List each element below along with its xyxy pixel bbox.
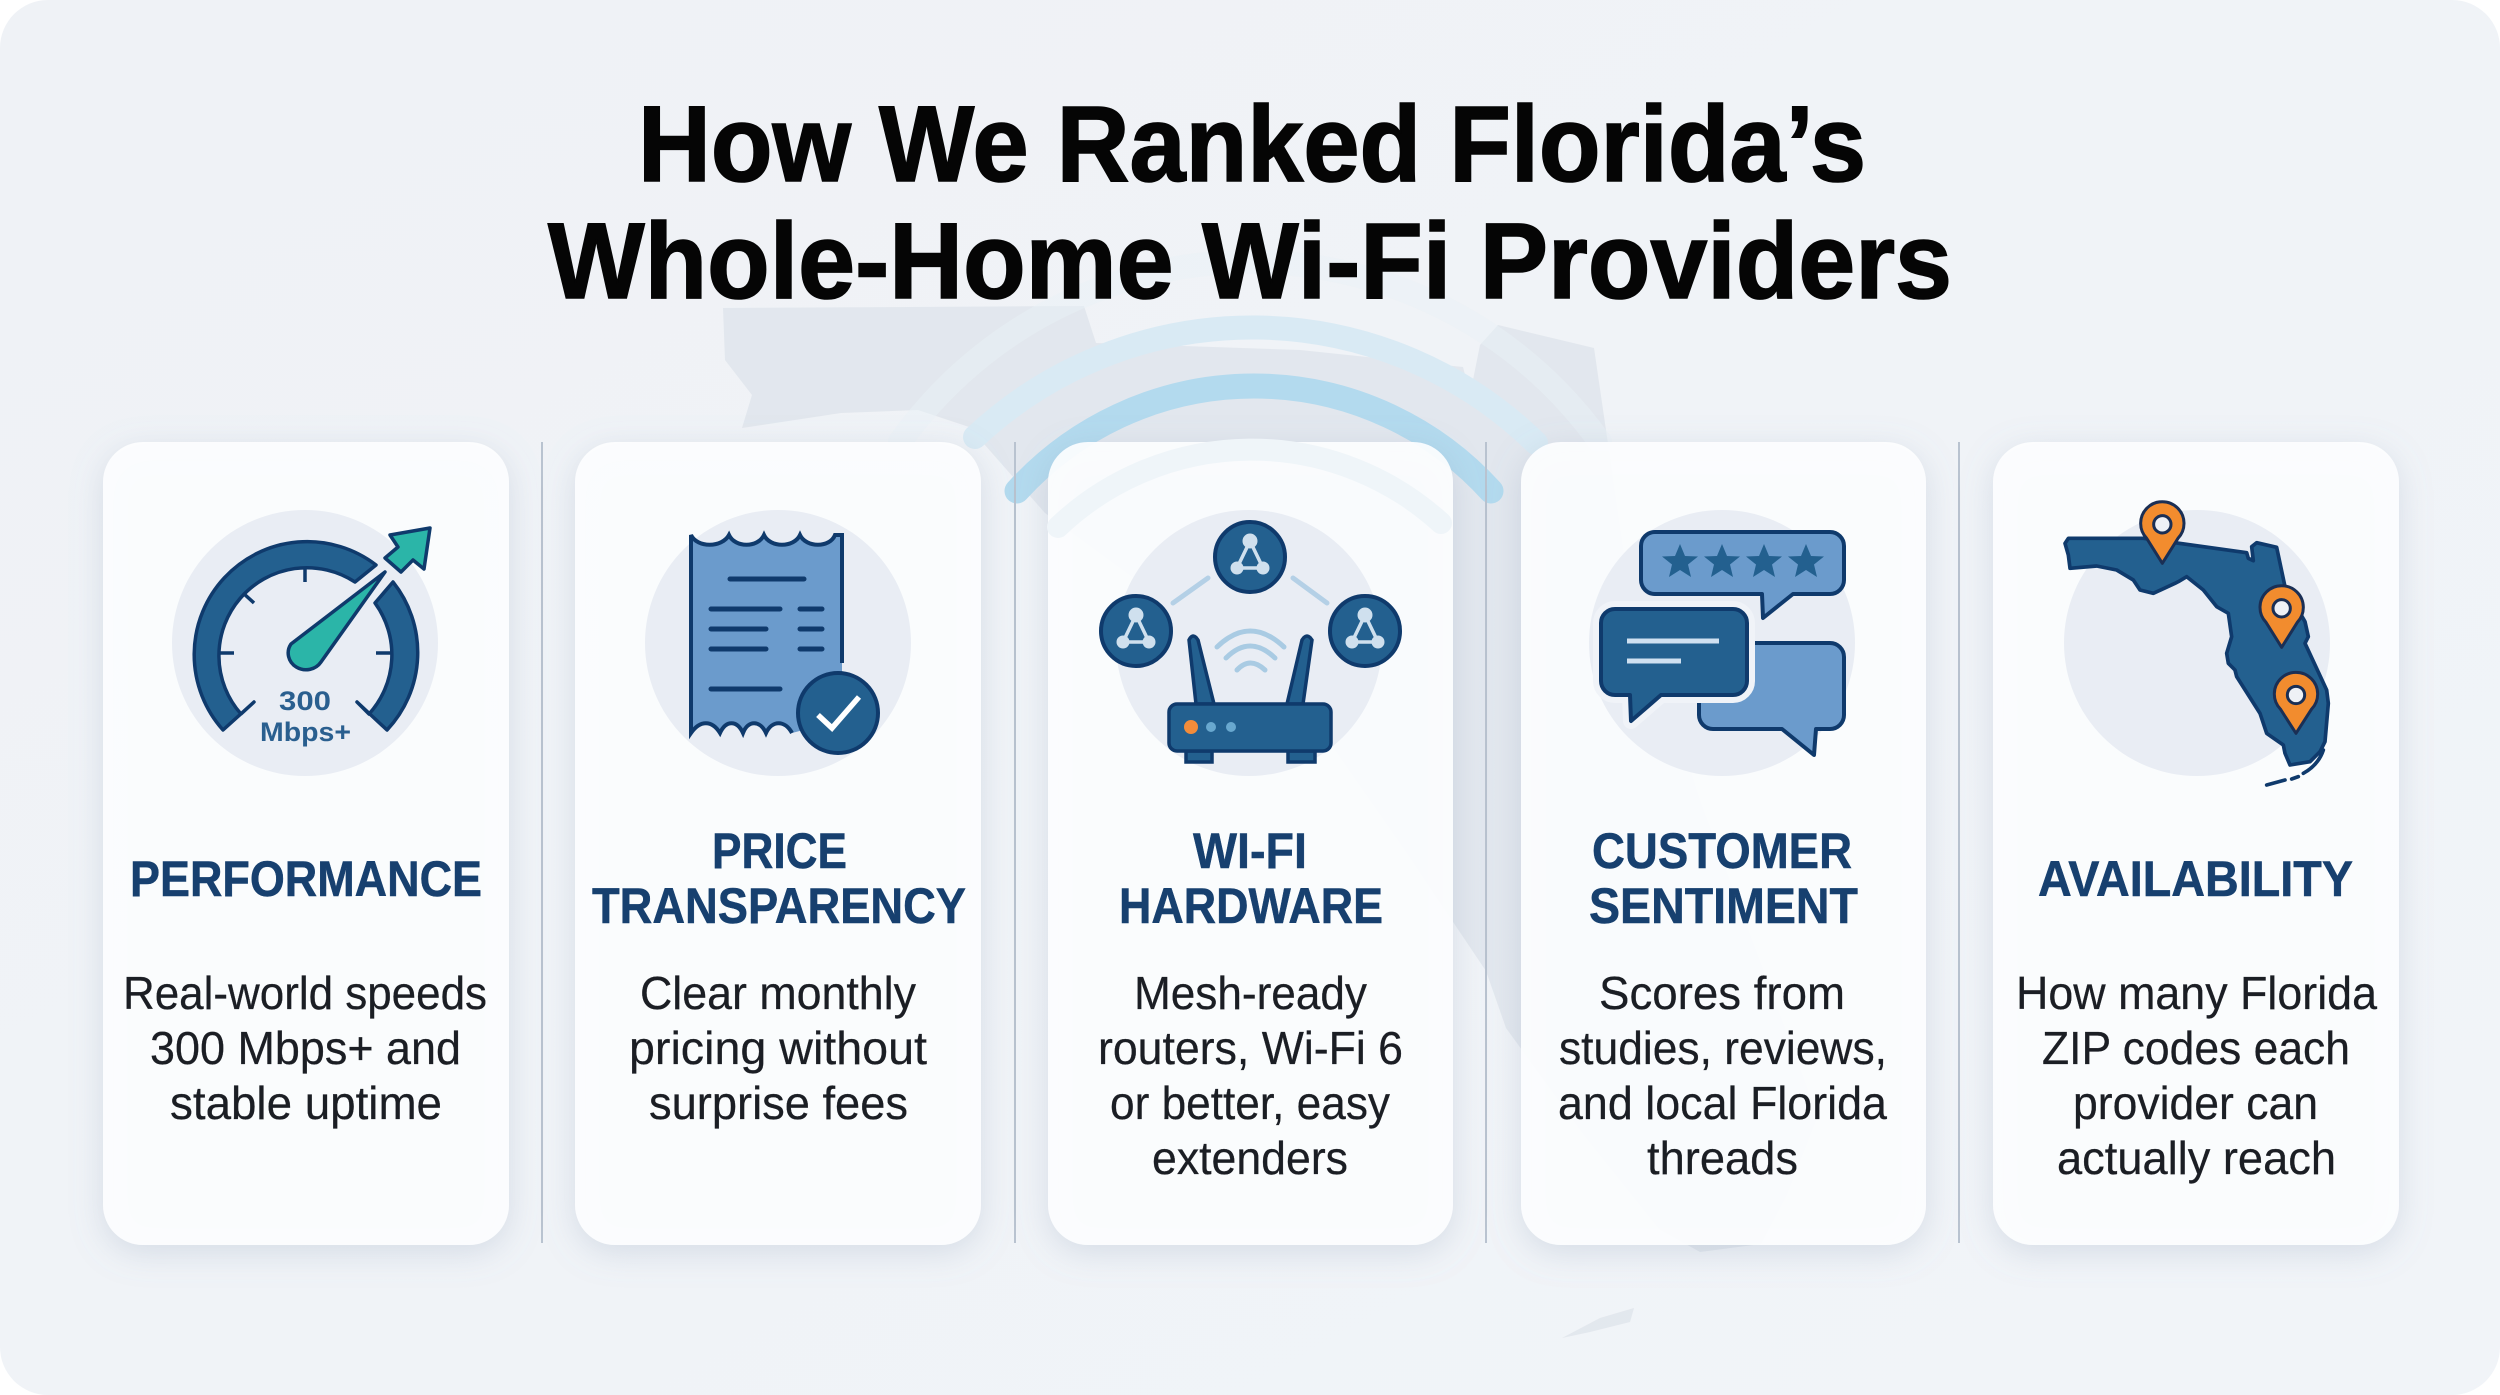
icon: speedometer (194, 528, 430, 730)
gauge label (260, 686, 351, 747)
description (123, 967, 487, 1129)
heading: AVAILABILITY (2038, 851, 2353, 907)
description: and local Florida (1558, 1077, 1887, 1129)
icon circle (2064, 510, 2330, 776)
icon: mesh router (1101, 522, 1400, 762)
description: How many Florida (2016, 967, 2377, 1019)
icon: receipt with check (691, 535, 878, 753)
description (1098, 967, 1403, 1184)
panel: wi-fi hardware (1048, 442, 1453, 1245)
description: threads (1647, 1132, 1798, 1184)
heading: PERFORMANCE (130, 851, 482, 907)
icon circle (645, 510, 911, 776)
gauge label: Mbps+ (260, 717, 351, 747)
heading: HARDWARE (1119, 878, 1383, 934)
panel: price transparency (575, 442, 981, 1245)
description: Scores from (1599, 967, 1845, 1019)
heading (592, 823, 966, 934)
gauge label: 300 (279, 686, 331, 716)
description: pricing without (629, 1022, 927, 1074)
description: ZIP codes each (2042, 1022, 2350, 1074)
icon circle (172, 510, 438, 776)
description: or better, easy (1110, 1077, 1390, 1129)
card background (575, 442, 981, 1245)
description: provider can (2073, 1077, 2318, 1129)
description: Real-world speeds (123, 967, 487, 1019)
description: Clear monthly (640, 967, 916, 1019)
description: studies, reviews, (1559, 1022, 1887, 1074)
icon circle (1116, 510, 1382, 776)
description: Mesh-ready (1134, 967, 1367, 1019)
description: extenders (1152, 1132, 1348, 1184)
watermark: Florida silhouette (723, 306, 1818, 1338)
heading (1589, 823, 1858, 934)
icon circle (1589, 510, 1855, 776)
description: routers, Wi-Fi 6 (1098, 1022, 1403, 1074)
heading: PRICE (712, 823, 847, 879)
panel: customer sentiment (1521, 442, 1926, 1245)
description (629, 967, 927, 1129)
dividers (542, 442, 1959, 1243)
description (1558, 967, 1887, 1184)
card background (1521, 442, 1926, 1245)
panel: availability (1993, 442, 2399, 1245)
icon: chat bubbles with stars (1601, 532, 1844, 755)
description (2016, 967, 2377, 1184)
card background (103, 442, 509, 1245)
inner wifi arc (1058, 450, 1441, 527)
title: How We Ranked Florida’s (638, 83, 1866, 204)
heading: WI-FI (1193, 823, 1307, 879)
icon: Florida map with pins (2065, 502, 2328, 785)
title (548, 83, 1952, 321)
description: 300 Mbps+ and (150, 1022, 461, 1074)
heading: SENTIMENT (1589, 878, 1858, 934)
description: actually reach (2057, 1132, 2336, 1184)
description: stable uptime (170, 1077, 442, 1129)
heading (1119, 823, 1383, 934)
panel: performance (103, 442, 509, 1245)
description: surprise fees (649, 1077, 908, 1129)
title: Whole-Home Wi-Fi Providers (548, 200, 1952, 321)
heading: CUSTOMER (1592, 823, 1852, 879)
wifi arcs backdrop (900, 262, 1600, 491)
heading: TRANSPARENCY (592, 878, 966, 934)
card background (1993, 442, 2399, 1245)
card background (1048, 442, 1453, 1245)
